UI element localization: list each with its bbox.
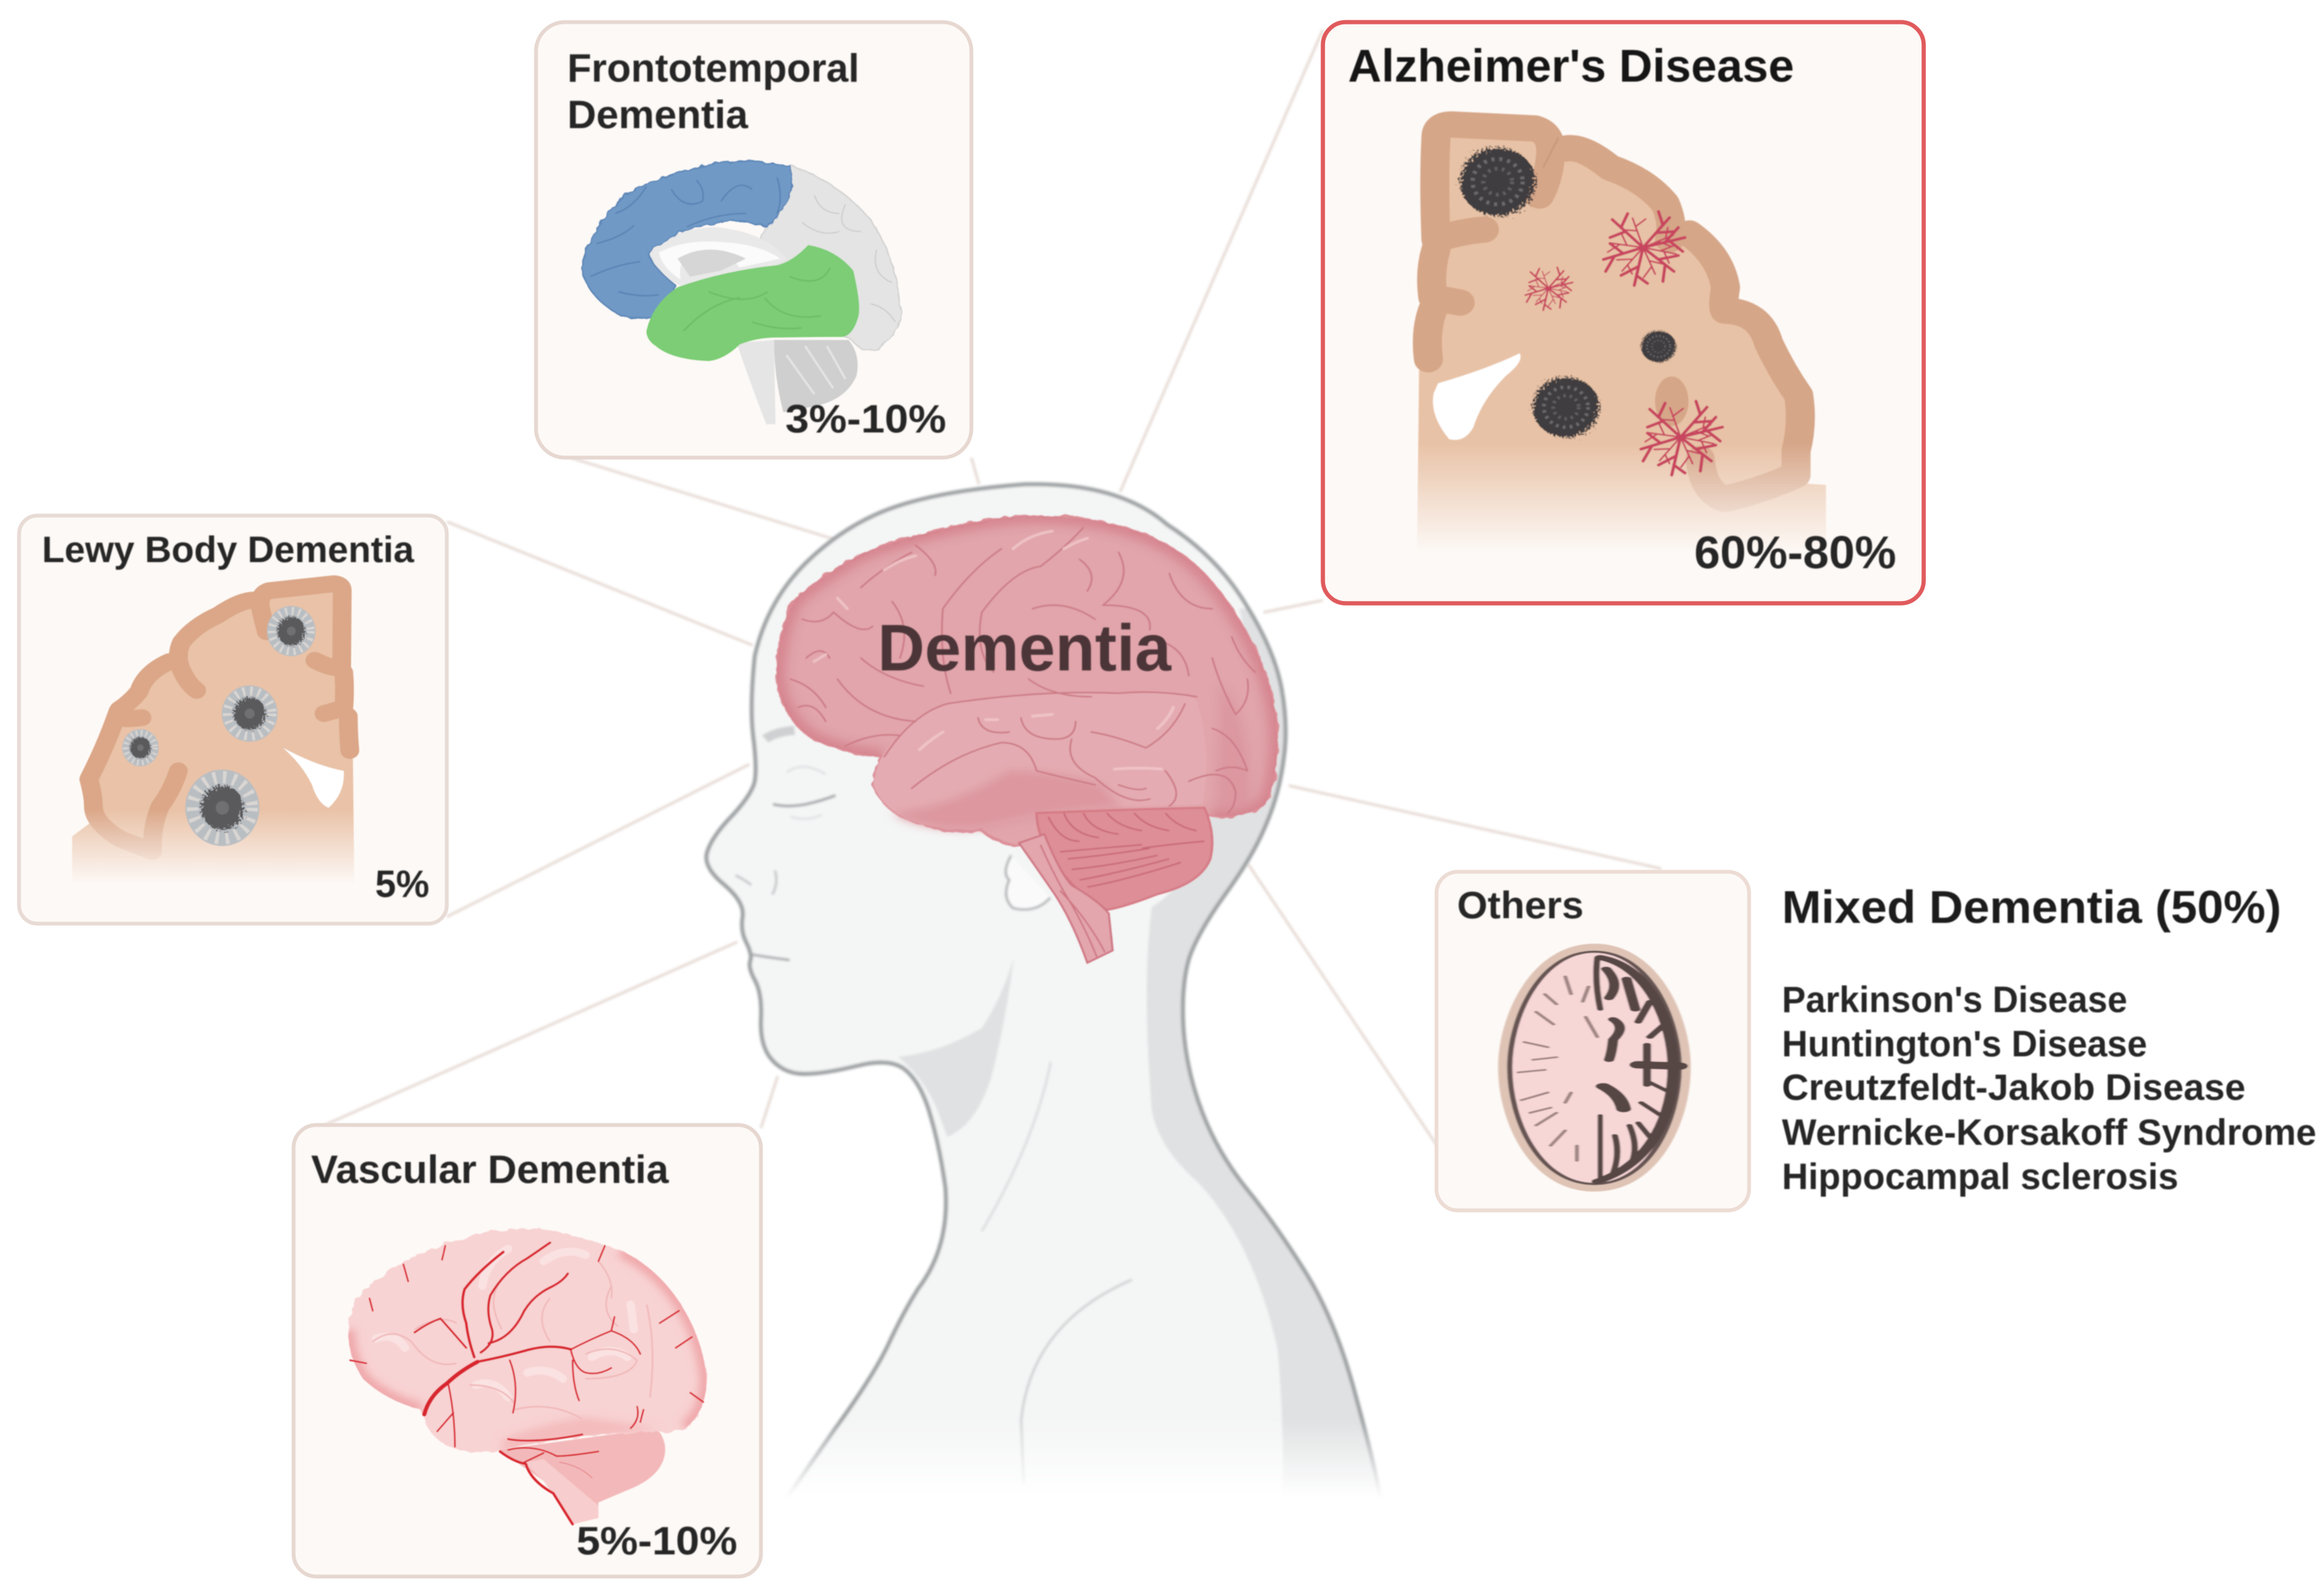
list: other dementia causes bbox=[1782, 980, 2316, 1197]
list: other dementia causes: Huntington's Disease bbox=[1782, 1024, 2147, 1065]
illustration: cortex with Lewy bodies bbox=[72, 584, 355, 889]
illustration: axial brain section bbox=[1498, 943, 1691, 1191]
heading: Lewy Body Dementia: Lewy Body Dementia bbox=[42, 530, 414, 571]
heading: Frontotemporal Dementia: Frontotemporal bbox=[567, 47, 859, 91]
leader lines bbox=[325, 30, 1661, 1145]
heading: Vascular Dementia: Vascular Dementia bbox=[311, 1148, 669, 1192]
illustration: cortex with plaques and tangles bbox=[1417, 124, 1826, 559]
prevalence: 5%-10%: 5%-10% bbox=[576, 1519, 737, 1564]
heading: Alzheimer's Disease: Alzheimer's Disease bbox=[1348, 40, 1794, 92]
Lewy bodies bbox=[122, 606, 316, 846]
panel: Lewy Body Dementia bbox=[19, 516, 447, 924]
panel: Vascular Dementia bbox=[294, 1125, 761, 1577]
panel: Frontotemporal Dementia bbox=[536, 22, 971, 458]
heading: Frontotemporal Dementia: Dementia bbox=[567, 93, 749, 137]
amyloid plaques bbox=[1460, 147, 1676, 438]
list: other dementia causes: Wernicke-Korsakoff Syndrome bbox=[1782, 1113, 2316, 1153]
prevalence: 3%-10%: 3%-10% bbox=[785, 397, 946, 442]
title: Dementia: Dementia bbox=[878, 612, 1172, 685]
illustration: brain with blood vessels bbox=[348, 1229, 707, 1524]
central brain bbox=[777, 516, 1277, 963]
list: other dementia causes: Creutzfeldt-Jakob Disease bbox=[1782, 1068, 2245, 1108]
list: other dementia causes: Parkinson's Disease bbox=[1782, 980, 2127, 1020]
head silhouette bbox=[703, 481, 1380, 1490]
prevalence: 5%: 5% bbox=[375, 863, 429, 905]
heading: Frontotemporal Dementia bbox=[567, 47, 859, 137]
heading: Mixed Dementia (50%): Mixed Dementia (50%) bbox=[1782, 882, 2281, 933]
heading: Others: Others bbox=[1457, 884, 1584, 927]
brainstem bbox=[1019, 834, 1112, 963]
panel: Alzheimer's Disease bbox=[1323, 22, 1924, 603]
cerebellum bbox=[1036, 808, 1212, 910]
temporal lobe bbox=[873, 691, 1206, 829]
cortical folds bbox=[791, 528, 1255, 813]
neurofibrillary tangles bbox=[1523, 210, 1724, 477]
prevalence: 60%-80%: 60%-80% bbox=[1694, 527, 1896, 578]
list: other dementia causes: Hippocampal sclerosis bbox=[1782, 1157, 2178, 1197]
illustration: brain with frontal and temporal lobes highlighted bbox=[581, 162, 901, 424]
panel: Others bbox=[1436, 872, 1749, 1210]
